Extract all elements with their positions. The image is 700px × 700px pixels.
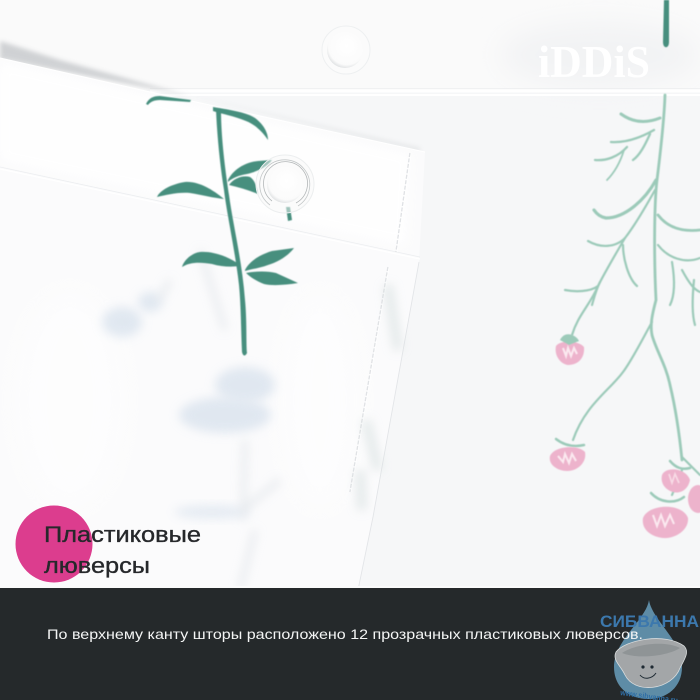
leaf tip behind grommet	[286, 207, 292, 221]
clear plastic grommet	[256, 155, 314, 213]
water drop	[614, 600, 682, 699]
heading	[44, 522, 201, 578]
lower stems	[572, 286, 598, 335]
pink blob accent	[16, 506, 92, 582]
main stem	[651, 95, 682, 460]
shadow leaves near hem	[360, 285, 398, 510]
flower 1	[556, 342, 584, 365]
brand logo IDDIS: iDDiS	[538, 36, 650, 87]
see-through shadow print	[102, 250, 398, 590]
leaf left	[157, 182, 224, 199]
heading: люверсы	[44, 553, 150, 578]
bath tub	[615, 639, 687, 688]
leaf top left	[146, 96, 191, 105]
flower 2	[550, 447, 585, 471]
flower 5	[688, 485, 700, 513]
upper branches	[621, 114, 660, 121]
calyxes	[556, 439, 584, 446]
leaf lower left	[182, 252, 240, 267]
brand text: СИБВАННА	[600, 612, 699, 631]
shadow flower left	[102, 307, 142, 337]
stem	[216, 109, 247, 356]
front curtain flap	[0, 41, 425, 590]
watermark: Sibvanna bath mascot	[600, 600, 699, 700]
leaf upper small	[229, 176, 258, 194]
flower 1 calyx	[560, 334, 579, 345]
pink flowers	[550, 334, 700, 538]
shadow stems	[158, 250, 280, 590]
leaf curved top right	[213, 107, 268, 140]
leaf upper right	[228, 160, 272, 182]
flower 4	[643, 507, 688, 538]
leaf lower right	[245, 248, 294, 271]
leaf bottom right	[246, 272, 298, 285]
left floral print	[146, 0, 669, 356]
smile	[640, 673, 656, 678]
leaf stem tip	[663, 0, 669, 47]
caption text: По верхнему канту шторы расположено 12 прозрачных пластиковых люверсов.	[47, 626, 643, 642]
heading: Пластиковые	[44, 522, 201, 547]
right floral print	[556, 95, 700, 502]
eyes	[641, 665, 654, 669]
middle branches	[594, 180, 656, 218]
top grommet	[322, 26, 370, 74]
shadow flower centre	[179, 397, 271, 433]
dark caption band	[0, 586, 700, 700]
flower 3	[662, 469, 690, 492]
tub inner	[622, 644, 680, 656]
stitching lines	[0, 153, 420, 492]
